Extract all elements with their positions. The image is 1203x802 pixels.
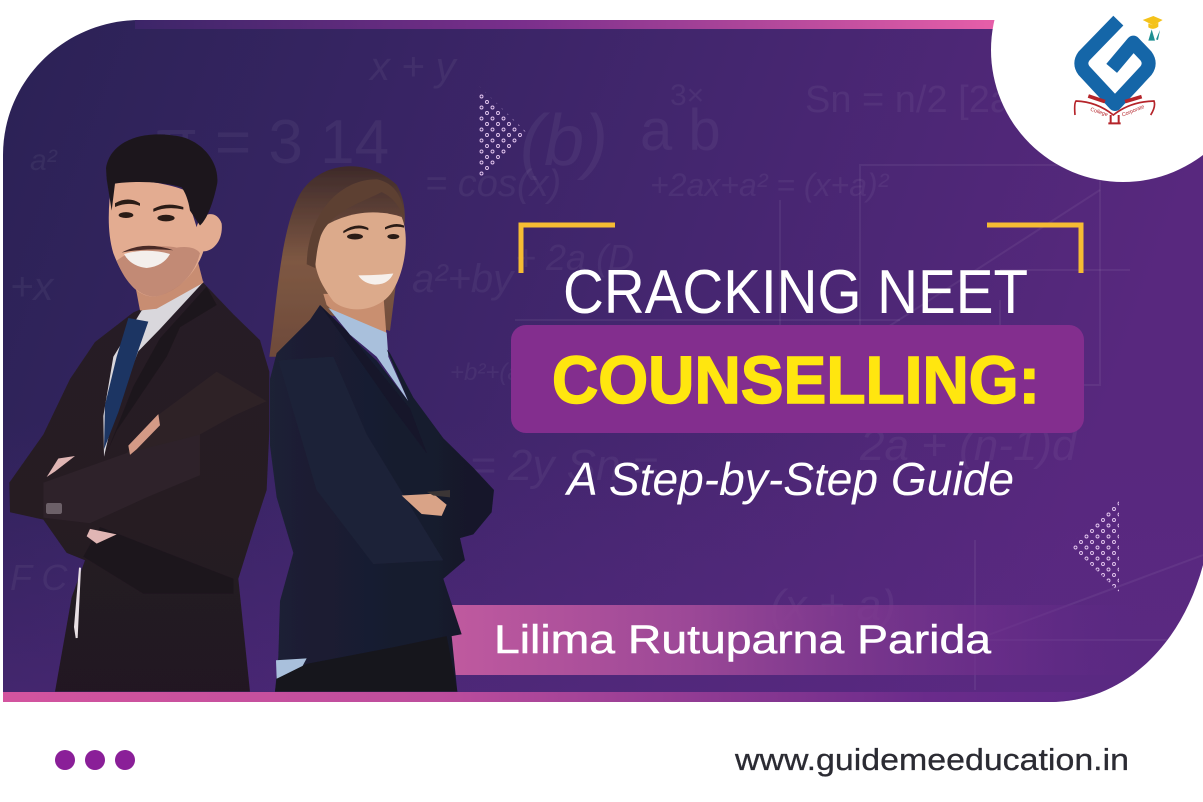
man hands <box>128 414 160 455</box>
woman watch <box>427 490 450 497</box>
faint chalkboard math: π = 3 14 <box>155 108 389 177</box>
white top right cover <box>1000 0 1203 20</box>
woman smile <box>358 274 393 285</box>
faint chalkboard math: + 2a (D <box>515 237 634 278</box>
top accent bar <box>135 20 1000 29</box>
faint chalkboard math: = cos(x) <box>425 163 561 205</box>
woman hair <box>269 166 405 357</box>
bottom accent bar <box>3 692 1090 702</box>
website url: www.guidemeeducation.in <box>734 742 1129 777</box>
man eyes <box>115 200 183 221</box>
three dots <box>55 750 135 770</box>
author name: Lilima Rutuparna Parida <box>494 618 992 662</box>
person: man <box>9 134 269 692</box>
woman jacket <box>270 305 494 692</box>
man moustache <box>122 246 173 252</box>
woman hand <box>402 494 447 516</box>
faint chalkboard math: x + y <box>368 45 459 89</box>
subtitle: A Step-by-Step Guide <box>564 453 1014 505</box>
faint chalkboard math: (x + a) <box>770 581 896 630</box>
woman shirt cuff <box>276 658 307 679</box>
faint chalkboard math: F C <box>10 557 68 598</box>
dotted triangle right <box>1070 497 1119 592</box>
faint chalkboard math: 2a + (n-1)d <box>859 421 1078 470</box>
white logo circle <box>991 0 1203 182</box>
faint chalkboard math: +x <box>10 265 55 309</box>
man neck <box>133 257 203 311</box>
man hair <box>106 134 217 225</box>
man head <box>109 181 222 297</box>
woman face <box>315 212 406 309</box>
woman neck <box>323 294 387 338</box>
author name band <box>448 605 1138 675</box>
logo graduation cap <box>1143 16 1163 29</box>
faint chalkboard math: +2ax+a² = (x+a)² <box>650 167 890 203</box>
faint chalkboard math: Sn = n/2 [2a <box>805 79 1012 121</box>
logo book labels: College <box>1089 107 1108 118</box>
logo AI mark <box>1148 29 1160 41</box>
woman arm shading <box>278 357 443 564</box>
faint chalkboard math <box>10 45 1203 690</box>
faint chalkboard math: (b) <box>520 101 608 181</box>
faint chalkboard math: a²+by <box>412 257 516 301</box>
woman trousers <box>275 636 457 692</box>
man shirt <box>103 281 204 457</box>
faint chalkboard math: a b <box>640 98 721 163</box>
heading: cracking neet: CRACKING NEET <box>563 258 1028 327</box>
faint chalkboard math: a² <box>30 144 58 177</box>
logo book labels <box>1089 104 1145 119</box>
logo book <box>1075 96 1155 123</box>
faint chalkboard math: = 2y Sn = <box>470 441 658 490</box>
man jacket <box>9 283 269 692</box>
faint chalkboard math: 3× <box>670 79 704 112</box>
logo book labels: Corporate <box>1121 104 1145 119</box>
logo <box>1075 16 1163 123</box>
man tie <box>104 318 148 449</box>
faint chalkboard math: +b²+(a <box>450 359 521 386</box>
dotted triangle top <box>478 85 526 180</box>
man lapels <box>107 286 217 453</box>
woman hair parting <box>307 179 404 268</box>
title brackets <box>521 225 1081 273</box>
woman lapel <box>320 305 427 453</box>
man stubble <box>117 246 200 297</box>
highlighted pill <box>511 325 1084 433</box>
woman eyes <box>343 224 404 240</box>
woman shirt <box>328 308 408 401</box>
man buttons <box>46 503 62 514</box>
heading: counselling: COUNSELLING: <box>552 343 1040 418</box>
person: woman <box>269 166 494 692</box>
man smile <box>124 251 170 268</box>
logo G mark <box>1081 21 1149 104</box>
